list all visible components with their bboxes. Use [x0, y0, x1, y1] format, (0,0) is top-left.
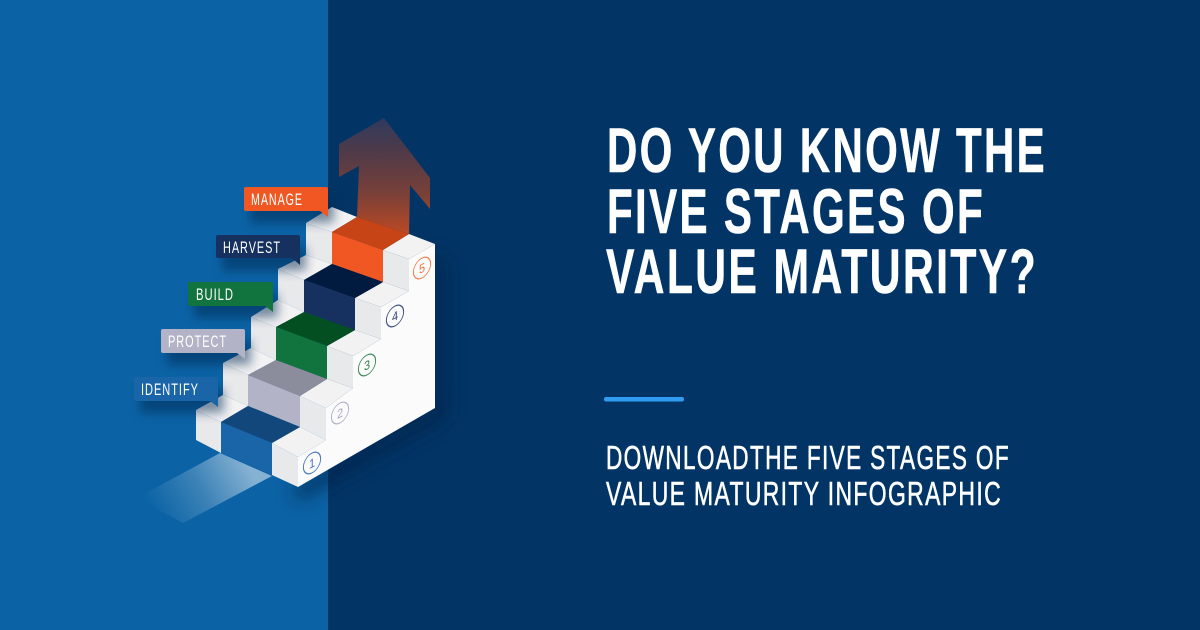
label: protect: PROTECT — [168, 332, 227, 351]
staircase shadow — [290, 250, 447, 500]
side wall — [298, 244, 435, 487]
label: build: BUILD — [196, 285, 234, 304]
number badge 3 — [358, 351, 376, 379]
number badge 4: 4 — [392, 308, 398, 325]
title — [606, 116, 1047, 307]
subheading: DOWNLOADTHE FIVE STAGES OF — [606, 440, 1010, 477]
number badge 5 — [413, 254, 431, 282]
number badge 2: 2 — [337, 405, 343, 422]
subheading: VALUE MATURITY INFOGRAPHIC — [606, 476, 1002, 513]
staircase illustration — [196, 207, 435, 487]
subheading — [606, 440, 1010, 513]
number badge 1: 1 — [309, 455, 315, 472]
number badge 4 — [386, 302, 404, 330]
step 4 navy — [304, 264, 383, 330]
title: FIVE STAGES OF — [607, 177, 985, 247]
number badge 2 — [331, 399, 349, 427]
label: identify — [134, 377, 224, 413]
label: manage — [244, 187, 334, 223]
step 1 blue — [221, 406, 300, 475]
right blocks — [272, 234, 435, 487]
divider accent — [604, 397, 684, 402]
step 5 orange — [332, 217, 409, 282]
light beam on ground — [137, 453, 272, 523]
label: build — [188, 282, 278, 318]
left blocks — [196, 207, 357, 453]
number badge 3: 3 — [364, 357, 370, 374]
label: protect — [161, 329, 251, 365]
step 2 grey — [248, 360, 327, 427]
label: harvest: HARVEST — [223, 238, 281, 257]
step 3 green — [276, 312, 355, 379]
label: identify: IDENTIFY — [141, 380, 199, 399]
number badge 1 — [303, 449, 321, 477]
panel: left blue background — [0, 0, 328, 630]
label: manage: MANAGE — [251, 190, 303, 209]
number badge 5: 5 — [419, 260, 425, 277]
panel: right navy background — [328, 0, 1200, 630]
icon: rising arrow — [339, 118, 430, 234]
label: harvest — [216, 235, 306, 271]
